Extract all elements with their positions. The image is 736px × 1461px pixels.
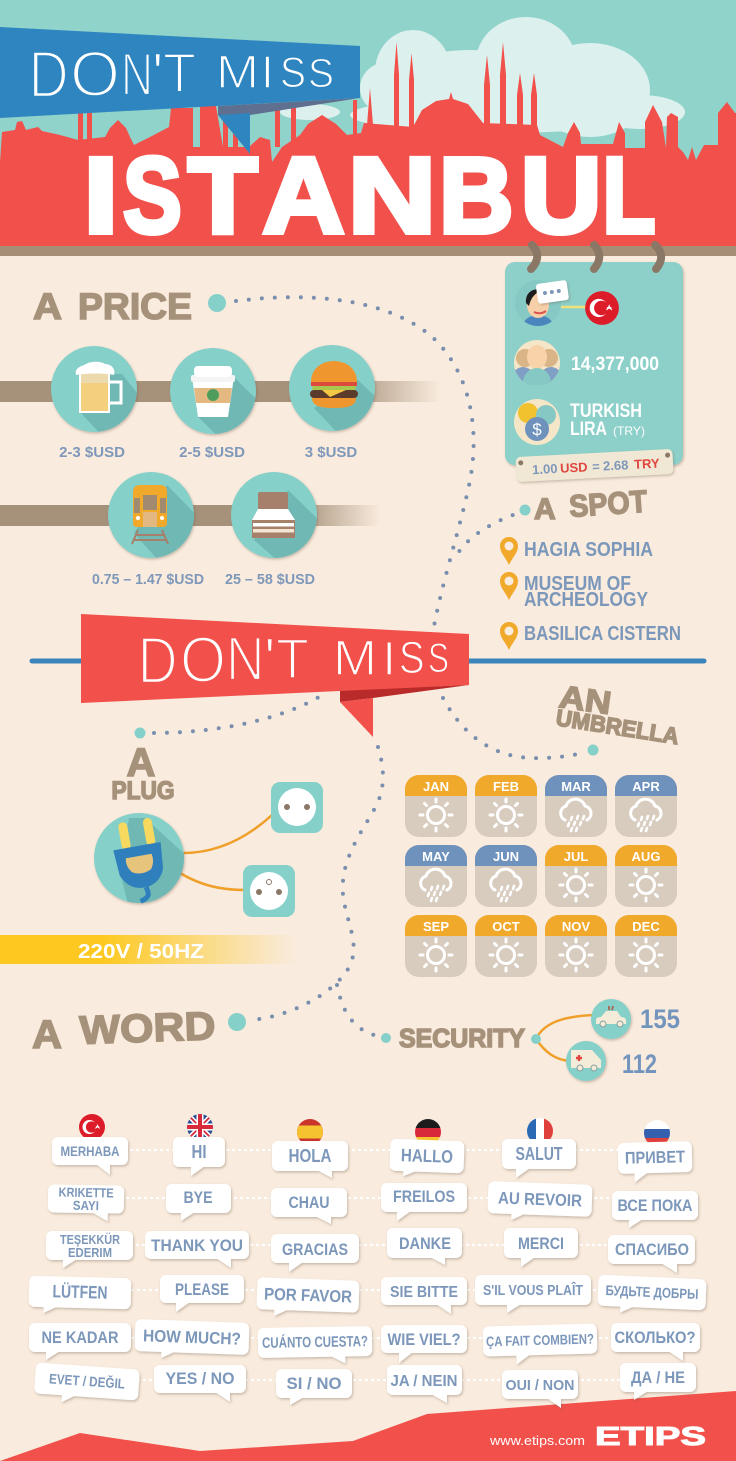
phrase: ÇA FAIT COMBIEN?: ÇA FAIT COMBIEN? xyxy=(486,1331,594,1349)
month: JUL xyxy=(545,845,607,907)
title: ISTANBUL: N xyxy=(348,134,436,256)
phrase: SI / NO: SI / NO xyxy=(286,1374,342,1393)
heading: A PRICE: PRICE xyxy=(78,286,192,327)
icon: currency coins: $ xyxy=(532,420,542,439)
phrase: S'IL VOUS PLAÎT: S'IL VOUS PLAÎT xyxy=(483,1281,583,1299)
banner text: DON'T MISS xyxy=(138,623,449,697)
phrase: KRIKETTE SAYI xyxy=(48,1184,124,1222)
icon: currency coins xyxy=(514,399,560,445)
icon: plug xyxy=(94,813,189,908)
card body xyxy=(505,262,683,465)
phrase: TEŞEKKÜR EDERIM: EDERIM xyxy=(68,1245,112,1260)
phrase: YES / NO: YES / NO xyxy=(166,1369,234,1388)
phrase: OUI / NON: OUI / NON xyxy=(506,1377,574,1394)
phrase: MERHABA xyxy=(52,1137,128,1175)
phrase: JA / NEIN: JA / NEIN xyxy=(390,1373,458,1390)
heading: A PLUG: A xyxy=(127,741,155,785)
phrase: AU REVOIR: AU REVOIR xyxy=(498,1189,582,1210)
banner text: DON'T MISS: D xyxy=(29,37,69,111)
icon: population xyxy=(514,340,560,386)
heading: A PRICE: A xyxy=(33,286,62,327)
month: AUG: AUG xyxy=(632,849,660,864)
phrase: AU REVOIR xyxy=(487,1181,593,1223)
police number: 155 xyxy=(640,1004,680,1034)
footer xyxy=(0,1391,736,1461)
spot: Museum of Archeology: MUSEUM OF xyxy=(524,573,631,595)
voltage bar: 220V / 50HZ xyxy=(78,941,204,963)
month: MAR xyxy=(545,775,607,837)
spot: Basilica Cistern: BASILICA CISTERN xyxy=(524,623,681,645)
footer red shape xyxy=(0,1391,736,1461)
phrase: TEŞEKKÜR EDERIM: TEŞEKKÜR xyxy=(60,1232,121,1247)
flag: United Kingdom xyxy=(187,1114,213,1137)
phrase: DANKE: DANKE xyxy=(399,1234,451,1253)
center ribbon banner xyxy=(81,614,469,737)
phrase: HI: HI xyxy=(192,1142,206,1162)
banner text: DON'T MISS: ' xyxy=(152,41,163,108)
month: OCT: OCT xyxy=(492,919,520,934)
phrase: HALLO: HALLO xyxy=(401,1145,453,1167)
phrase: HOW MUCH? xyxy=(134,1319,250,1361)
dotted connectors xyxy=(154,297,582,1036)
voltage bar xyxy=(0,935,295,964)
phrase: GRACIAS xyxy=(271,1234,359,1272)
phrase: HOW MUCH?: HOW MUCH? xyxy=(143,1326,241,1349)
title: ISTANBUL xyxy=(83,134,655,256)
heading: AN UMBRELLA: UMBRELLA xyxy=(554,704,681,749)
phrase: EVET / DEĞIL xyxy=(34,1362,140,1408)
phrase: MERHABA: MERHABA xyxy=(60,1143,120,1159)
banner text: DON'T MISS: S xyxy=(399,632,424,683)
header: skyline scene xyxy=(0,0,736,256)
currency text: LIRA xyxy=(570,419,607,440)
flag: Germany xyxy=(415,1119,441,1140)
phrase: SALUT: SALUT xyxy=(516,1144,562,1164)
phrase: CHAU: CHAU xyxy=(288,1193,330,1212)
city skyline silhouette xyxy=(0,42,736,246)
month: JAN xyxy=(405,775,467,837)
phrase: BYE: BYE xyxy=(184,1188,212,1207)
month: OCT xyxy=(475,915,537,977)
currency text: TURKISH xyxy=(570,401,642,422)
month: APR xyxy=(615,775,677,837)
banner text: DON'T MISS xyxy=(29,37,334,111)
phrase: GRACIAS: GRACIAS xyxy=(282,1240,348,1259)
banner text: DON'T MISS: T xyxy=(163,41,196,104)
ground strip xyxy=(0,246,736,256)
ambulance number: 112 xyxy=(622,1049,657,1079)
banner text: DON'T MISS: S xyxy=(428,634,449,681)
banner text: DON'T MISS: D xyxy=(138,623,178,697)
phrase: EVET / DEĞIL: EVET / DEĞIL xyxy=(49,1369,126,1392)
phrase: FREILOS xyxy=(381,1183,467,1221)
heading: A PRICE xyxy=(33,286,226,327)
phrase: SALUT xyxy=(502,1139,576,1178)
month: FEB: FEB xyxy=(493,779,519,794)
phrase: БУДЬТЕ ДОБРЫ: БУДЬТЕ ДОБРЫ xyxy=(605,1282,699,1302)
row connectors xyxy=(29,1150,707,1380)
phrase: SIE BITTE: SIE BITTE xyxy=(390,1284,458,1301)
phrase: WIE VIEL? xyxy=(381,1325,467,1363)
heading: A PLUG xyxy=(112,728,174,805)
price bar row 2 xyxy=(0,505,380,526)
logo: ETIPS: ETIPS xyxy=(595,1421,706,1451)
icon: police car xyxy=(591,999,631,1039)
banner text: DON'T MISS: ' xyxy=(264,626,275,693)
heading: A SPOT: A xyxy=(534,493,556,526)
month: MAY: MAY xyxy=(422,849,450,864)
panel: phrasebook xyxy=(28,1114,707,1408)
coffee price: 2-5 $USD xyxy=(179,444,245,461)
exchange rate tag: USD xyxy=(560,459,588,476)
heading: AN UMBRELLA: AN xyxy=(557,678,614,721)
info card xyxy=(505,245,683,482)
phrase: KRIKETTE SAYI: KRIKETTE xyxy=(58,1185,114,1200)
phrase: СПАСИБО xyxy=(608,1235,695,1273)
branch lines xyxy=(536,1015,594,1061)
spot: Museum of Archeology: ARCHEOLOGY xyxy=(524,589,649,611)
divider line xyxy=(32,658,704,664)
phrase: TEŞEKKÜR EDERIM xyxy=(46,1231,133,1268)
month: APR: APR xyxy=(632,779,660,794)
phrase: HOLA: HOLA xyxy=(288,1146,332,1166)
banner text: DON'T MISS: N xyxy=(121,41,153,108)
flag: Spain xyxy=(297,1119,323,1141)
icon: pin xyxy=(500,572,518,600)
month: DEC xyxy=(615,915,677,977)
banner text: DON'T MISS: O xyxy=(70,38,120,110)
banner text: DON'T MISS: N xyxy=(226,625,264,694)
icon: person speaking xyxy=(524,280,571,326)
month: NOV xyxy=(545,915,607,977)
phrase: CUÁNTO CUESTA? xyxy=(258,1326,372,1365)
phrase: ДА / НЕ xyxy=(620,1363,696,1400)
phrase: LÜTFEN xyxy=(28,1276,131,1315)
burger price: 3 $USD xyxy=(305,444,357,461)
phrase: HALLO xyxy=(389,1139,465,1178)
phrase: MERCI xyxy=(504,1228,578,1267)
title: ISTANBUL: T xyxy=(188,134,258,256)
month: DEC: DEC xyxy=(632,919,660,934)
month: JUN xyxy=(475,845,537,907)
spot: Hagia Sophia: HAGIA SOPHIA xyxy=(524,539,653,561)
panel: plug and sockets xyxy=(94,782,323,917)
title: ISTANBUL: S xyxy=(123,134,182,256)
phrase: CHAU xyxy=(271,1188,347,1224)
phrase: СКОЛЬКО? xyxy=(611,1323,700,1361)
phrase: POR FAVOR: POR FAVOR xyxy=(264,1284,352,1307)
phrase: СКОЛЬКО?: СКОЛЬКО? xyxy=(614,1328,696,1347)
heading: A WORD: WORD xyxy=(79,1004,216,1053)
banner text: DON'T MISS: I xyxy=(261,46,274,98)
phrase: ДА / НЕ: ДА / НЕ xyxy=(631,1368,685,1387)
banner text: DON'T MISS: O xyxy=(180,623,226,696)
phrase: ÇA FAIT COMBIEN? xyxy=(483,1324,598,1365)
month: MAY xyxy=(405,845,467,907)
banner text: DON'T MISS: S xyxy=(308,50,334,96)
phrase: NE KADAR xyxy=(29,1323,131,1360)
speech bubbles xyxy=(28,1137,707,1408)
phrase: WIE VIEL?: WIE VIEL? xyxy=(388,1330,460,1349)
month: SEP: SEP xyxy=(423,919,449,934)
phrase: THANK YOU xyxy=(145,1231,249,1268)
phrase: YES / NO xyxy=(154,1365,246,1402)
heading: A PLUG: PLUG xyxy=(112,777,174,805)
phrase: ВСЕ ПОКА xyxy=(612,1191,698,1228)
icon: coffee cup xyxy=(170,348,258,437)
phrase: NE KADAR: NE KADAR xyxy=(42,1328,118,1347)
phrase: LÜTFEN: LÜTFEN xyxy=(52,1281,108,1303)
banner text: DON'T MISS: I xyxy=(382,633,396,686)
exchange rate tag: 1.00 xyxy=(532,461,558,477)
icon: beer xyxy=(51,346,138,435)
heading: A SPOT: SPOT xyxy=(568,484,648,524)
calendar: monthly weather xyxy=(405,775,677,977)
phrase: THANK YOU: THANK YOU xyxy=(151,1236,243,1255)
icon: pin xyxy=(500,537,518,565)
phrase: OUI / NON xyxy=(502,1370,578,1408)
exchange rate tag: = xyxy=(592,459,600,474)
icon: bed xyxy=(231,472,318,561)
phrase: ПРИВЕТ: ПРИВЕТ xyxy=(625,1147,686,1168)
phrase: СПАСИБО: СПАСИБО xyxy=(615,1240,689,1259)
month: SEP xyxy=(405,915,467,977)
spot: Museum of Archeology xyxy=(524,573,649,611)
phrase: БУДЬТЕ ДОБРЫ xyxy=(597,1275,707,1316)
phrase: BYE xyxy=(166,1184,231,1221)
banner text: DON'T MISS: M xyxy=(333,630,377,686)
population text: 14,377,000 xyxy=(571,354,659,375)
icon: socket type C xyxy=(271,782,323,833)
heading: A WORD: A xyxy=(32,1013,62,1057)
heading: A WORD xyxy=(32,1004,246,1057)
banner text: DON'T MISS: T xyxy=(276,627,309,691)
phrase: HOLA xyxy=(272,1141,348,1178)
phrase: PLEASE: PLEASE xyxy=(175,1280,229,1299)
month: AUG xyxy=(615,845,677,907)
title: ISTANBUL: A xyxy=(262,134,344,256)
phrase: CUÁNTO CUESTA?: CUÁNTO CUESTA? xyxy=(262,1333,368,1352)
title: ISTANBUL: U xyxy=(521,134,602,256)
phrase: MERCI: MERCI xyxy=(518,1234,564,1253)
icon: pin xyxy=(500,622,518,650)
sky xyxy=(0,0,736,170)
phrase: ПРИВЕТ xyxy=(618,1141,693,1183)
phrase: POR FAVOR xyxy=(256,1277,360,1319)
banner text: DON'T MISS: M xyxy=(216,45,259,98)
footer url: www.etips.com xyxy=(489,1433,585,1448)
month: JAN: JAN xyxy=(423,779,449,794)
icon: socket type E xyxy=(243,865,295,917)
flag: Turkey xyxy=(79,1114,105,1140)
phrase: SI / NO xyxy=(276,1369,352,1405)
calendar hooks xyxy=(531,245,661,269)
phrase: DANKE xyxy=(387,1228,462,1265)
bed price: 25 – 58 $USD xyxy=(225,571,315,588)
beer price: 2-3 $USD xyxy=(59,444,125,461)
exchange rate tag: 2.68 xyxy=(603,457,629,474)
exchange rate tag xyxy=(515,449,674,482)
phrase: PLEASE xyxy=(160,1275,244,1312)
train price: 0.75 – 1.47 $USD xyxy=(92,571,204,588)
heading: AN UMBRELLA xyxy=(554,678,681,756)
flag: France xyxy=(527,1118,553,1139)
heading: A SPOT xyxy=(520,484,648,526)
icon: Turkish flag xyxy=(585,291,619,325)
phrase: JA / NEIN xyxy=(387,1365,462,1403)
wires xyxy=(180,815,272,890)
title: ISTANBUL: L xyxy=(602,134,656,256)
icon: ambulance xyxy=(566,1041,606,1081)
icon: train xyxy=(108,472,196,561)
month: NOV: NOV xyxy=(562,919,590,934)
currency text xyxy=(570,401,645,440)
list: spots to visit xyxy=(500,537,681,650)
flag: Russia xyxy=(644,1120,670,1142)
panel: prices xyxy=(0,345,440,588)
month: MAR: MAR xyxy=(561,779,591,794)
top ribbon banner xyxy=(0,27,360,154)
security heading: SECURITY xyxy=(399,1023,525,1053)
panel: security xyxy=(381,999,680,1081)
banner text: DON'T MISS: S xyxy=(280,49,306,97)
phrase: HI xyxy=(173,1137,225,1176)
icon: burger xyxy=(289,345,377,434)
month: FEB xyxy=(475,775,537,837)
phrase: S'IL VOUS PLAÎT xyxy=(475,1275,591,1313)
currency text: (TRY) xyxy=(613,424,645,438)
title: ISTANBUL: I xyxy=(83,134,118,256)
price bar row 1 xyxy=(0,381,440,402)
phrase: KRIKETTE SAYI: SAYI xyxy=(73,1198,99,1213)
phrase: FREILOS: FREILOS xyxy=(393,1187,455,1206)
title: ISTANBUL: B xyxy=(439,134,514,256)
month: JUL: JUL xyxy=(564,849,588,864)
month: JUN: JUN xyxy=(493,849,519,864)
phrase: ВСЕ ПОКА: ВСЕ ПОКА xyxy=(618,1196,692,1215)
connector line xyxy=(561,306,586,308)
cloud xyxy=(280,17,685,137)
phrase: SIE BITTE xyxy=(381,1277,467,1314)
exchange rate tag: TRY xyxy=(634,456,660,472)
